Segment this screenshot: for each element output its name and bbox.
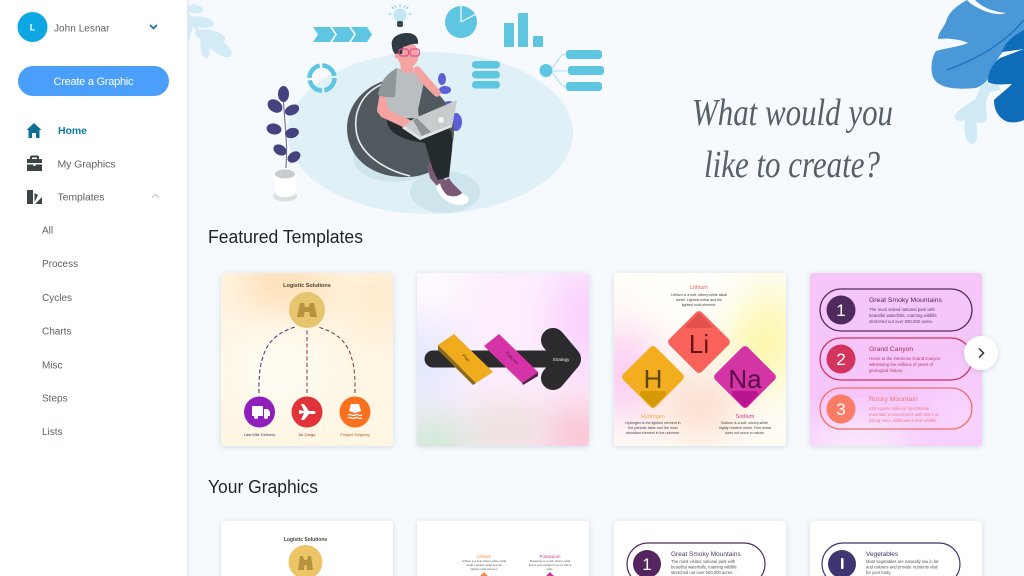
hydrogen text: the periodic table and the most xyxy=(628,426,678,430)
lithium text xyxy=(671,285,727,307)
head xyxy=(392,33,420,73)
execute block: Execute xyxy=(505,350,520,366)
graphic card: logistic: Logistic Solutions xyxy=(284,537,327,543)
execute block xyxy=(484,334,538,385)
graphic card: vegetables: Most vegetables are naturally low in fat xyxy=(866,559,939,564)
headline: handwritten: like to create? xyxy=(704,144,880,186)
hydrogen text: Hydrogen is the lightest element in xyxy=(625,421,681,425)
graphic card: elements: that is soft enough to be cut with a xyxy=(529,563,572,567)
arrow xyxy=(433,340,569,378)
graphic card: elements: Lithium is a soft, silvery-white metal xyxy=(462,559,506,563)
plant pot xyxy=(273,170,297,202)
plan block: Plan xyxy=(461,353,471,363)
sodium text: Sodium xyxy=(736,414,755,420)
icon: dropdown chevron xyxy=(150,25,157,28)
backdrop ellipse xyxy=(287,52,573,214)
dashed connectors xyxy=(259,327,355,393)
lithium text: Lithium is a soft, silvery-white alkali xyxy=(671,293,727,297)
lithium text: lightest solid element. xyxy=(682,303,716,307)
step 1: 1 xyxy=(836,301,846,320)
laptop xyxy=(402,100,457,140)
graphic card: logistic xyxy=(221,521,393,576)
lithium text: metal. Lightest metal and the xyxy=(676,298,722,302)
graphic card: parks: stretched out over 500,000 acres. xyxy=(671,570,733,575)
template category list xyxy=(42,226,78,438)
create button: Create a Graphic xyxy=(54,76,134,88)
leaf: top left decoration xyxy=(186,3,235,61)
nav item: templates: Templates xyxy=(58,192,104,204)
step 1: stretched out over 500,000 acres. xyxy=(869,319,933,324)
card: national parks xyxy=(808,272,984,449)
template category list: Cycles xyxy=(42,293,72,304)
step 2: Grand Canyon xyxy=(869,346,913,353)
icon: light bulb xyxy=(389,5,411,27)
template category list: Misc xyxy=(42,360,63,372)
card: strategy arrow xyxy=(415,272,591,449)
card: logistic solutions xyxy=(219,272,395,449)
graphic card: vegetables xyxy=(810,521,982,576)
step 2: Home to the immense Grand Canyon, xyxy=(869,356,941,361)
step 2: geological history. xyxy=(869,368,903,373)
card: logistic solutions: Last Mile Delivery xyxy=(244,432,275,437)
step 3: 3 xyxy=(836,400,846,419)
graphic card: elements: Potassium xyxy=(539,554,561,559)
Na diamond xyxy=(712,344,778,410)
graphic card: parks: beautiful waterfalls, roaming wildlife xyxy=(671,564,738,570)
card: logistic solutions: Freight Shipping xyxy=(340,432,370,437)
step 3: mountain environments with miles of xyxy=(869,412,939,417)
step 3: hiking trails, wildflowers and wildlife. xyxy=(869,418,938,423)
icon: bar chart xyxy=(504,13,543,47)
template category list: Lists xyxy=(42,427,63,438)
step 3: 415 square miles of spectacular xyxy=(869,406,930,411)
floor shadows xyxy=(353,134,480,213)
air cargo badge xyxy=(292,396,322,428)
template category list: All xyxy=(42,226,53,236)
headline: handwritten: What would you xyxy=(692,92,893,134)
card: strategy arrow: Strategy xyxy=(553,357,570,362)
icon: stacked list xyxy=(472,61,500,88)
hydrogen text: abundant element in the universe. xyxy=(626,431,680,435)
nav item: my graphics xyxy=(27,156,116,171)
beanbag xyxy=(347,78,454,177)
icon: pie chart xyxy=(445,6,477,38)
heading: Your Graphics: Your Graphics xyxy=(208,477,318,497)
torso xyxy=(380,68,424,119)
graphic card: elements: metal. Lightest metal and the xyxy=(466,563,502,567)
Li diamond: Li xyxy=(689,329,709,359)
card: logistic solutions: Logistic Solutions xyxy=(283,283,331,289)
H diamond xyxy=(620,344,686,410)
template category list: Steps xyxy=(42,394,68,404)
hydrogen text: Hydrogen xyxy=(641,414,665,420)
hydrogen text xyxy=(625,414,681,435)
nav item: home xyxy=(26,123,87,138)
graphic card: vegetables: and calories and provide nutrients vital xyxy=(866,564,938,570)
arms xyxy=(383,70,437,127)
sodium text xyxy=(719,414,771,435)
nav item: my graphics: My Graphics xyxy=(58,158,116,170)
plan block xyxy=(438,334,493,385)
next button xyxy=(964,336,998,370)
back leg and sock xyxy=(427,160,445,187)
sodium text: Sodium is a soft, silvery-white, xyxy=(721,421,769,425)
step 2: 2 xyxy=(836,350,846,369)
H diamond: H xyxy=(644,364,662,394)
graphic card: elements: lightest solid element. xyxy=(471,567,498,571)
step 1: The most visited national park with xyxy=(869,307,936,312)
step 2 xyxy=(820,338,972,380)
step 1: Great Smoky Mountains xyxy=(869,297,943,304)
panel: sidebar xyxy=(0,0,188,576)
graphic card: vegetables: Vegetables xyxy=(866,551,899,558)
user avatar xyxy=(18,12,48,42)
Li diamond xyxy=(666,309,732,375)
sodium text: does not occur in nature. xyxy=(725,431,765,435)
shoes xyxy=(436,178,469,205)
template category list: Process xyxy=(42,259,78,270)
graphic card: parks: The most visited national park with xyxy=(671,559,736,564)
hub circle xyxy=(289,292,325,328)
nav item: templates xyxy=(27,190,159,204)
icon: chevron process xyxy=(313,27,372,42)
legs xyxy=(387,116,452,180)
back plant xyxy=(429,73,462,131)
freight badge xyxy=(340,396,370,428)
step 2: witnessing the millions of years of xyxy=(869,362,934,367)
step 3 xyxy=(820,388,972,429)
card: logistic solutions: Air Cargo xyxy=(299,432,316,437)
graphic card: parks xyxy=(614,521,786,576)
graphic card: elements: Potassium is a soft, silvery metal xyxy=(530,559,571,563)
step 1 xyxy=(820,289,972,331)
graphic card: elements xyxy=(417,521,589,576)
graphic card: elements: knife. xyxy=(547,567,554,571)
create button xyxy=(18,66,169,96)
graphic card: parks: Great Smoky Mountains xyxy=(671,551,741,558)
left plant xyxy=(265,86,303,168)
user avatar: L xyxy=(30,22,36,32)
user name: John Lesnar xyxy=(54,24,110,34)
Na diamond: Na xyxy=(728,364,762,394)
near arm back portion xyxy=(382,98,384,110)
step 1: beautiful waterfalls, roaming wildlife xyxy=(869,313,937,318)
sodium text: highly reactive metal. Free metal xyxy=(719,426,771,430)
lithium text: Lithium xyxy=(690,285,708,291)
heading: Featured Templates: Featured Templates xyxy=(208,227,363,247)
step 3: Rocky Mountain xyxy=(869,396,918,403)
card: elements xyxy=(597,272,795,446)
template category list: Charts xyxy=(42,326,71,338)
graphic card: vegetables: for your body. xyxy=(866,570,891,575)
nav item: home: Home xyxy=(58,125,87,137)
headline: handwritten xyxy=(692,92,893,186)
graphic card: parks: 1 xyxy=(642,555,652,574)
illustration: person with laptop on beanbag xyxy=(265,5,604,214)
delivery badge xyxy=(244,396,275,428)
graphic card: elements: Lithium xyxy=(477,554,492,559)
icon: cycle ring xyxy=(310,66,334,90)
monstera leaves: top right xyxy=(932,0,1024,144)
icon: hierarchy xyxy=(540,50,604,91)
